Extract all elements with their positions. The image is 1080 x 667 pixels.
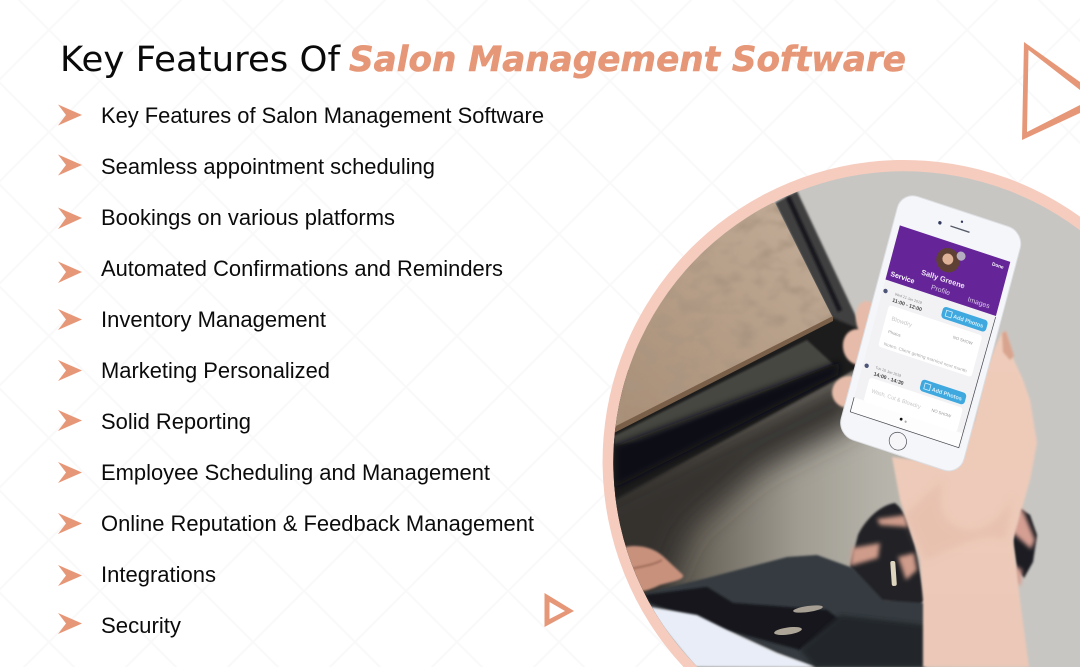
appointment 1: Photos [888, 329, 901, 338]
profile header: Done [991, 261, 1005, 271]
list item 9: Online Reputation & Feedback Management [101, 511, 534, 536]
appointment 1: Add Photos [952, 314, 984, 330]
title: Key Features Of [60, 40, 341, 80]
icon: small outlined triangle [544, 593, 574, 627]
appointment 2: Tue 20 Jan 2019 [875, 366, 902, 378]
appointment 2 [864, 364, 966, 431]
screen [850, 225, 1010, 449]
list item 11 [58, 613, 181, 638]
profile header [885, 225, 1010, 316]
white shirt [645, 606, 815, 667]
concrete floor [614, 171, 1080, 445]
sandal buckle [890, 561, 897, 586]
phone [837, 191, 1024, 475]
bench side [614, 318, 862, 500]
holding hand [892, 332, 1037, 667]
right sandal [1013, 505, 1037, 578]
photo ring [603, 160, 1080, 667]
appointment 1: Wed 21 Jan 2019 [895, 292, 922, 305]
list item 5: Inventory Management [101, 307, 326, 332]
thumb nail [1002, 331, 1014, 360]
bottom bar of the screen [850, 397, 963, 448]
photo: hand holding phone [590, 160, 1080, 667]
left sandal [849, 502, 924, 604]
list item 6: Marketing Personalized [101, 358, 330, 383]
list item 8: Employee Scheduling and Management [101, 460, 490, 485]
jeans buttons [793, 605, 823, 613]
bench leg [774, 192, 859, 329]
left hand [625, 546, 683, 591]
profile header: Service [890, 271, 915, 286]
palm creases [903, 494, 1004, 554]
bench wood top [614, 200, 833, 430]
list item 2: Seamless appointment scheduling [101, 154, 435, 179]
appointment 1: NO SHOW [952, 335, 973, 346]
appointment 1: 11:00 - 12:00 [892, 298, 922, 313]
list item 3: Bookings on various platforms [101, 205, 395, 230]
icon: large outlined triangle [1022, 42, 1080, 140]
profile header: Profile [930, 284, 951, 297]
shadow under bench [614, 370, 860, 616]
phone body [837, 191, 1024, 475]
home button [888, 432, 907, 450]
jeans [645, 555, 925, 667]
list item 11: Security [101, 613, 181, 638]
title [60, 40, 906, 80]
appointment 2: 14:00 - 14:30 [873, 371, 904, 387]
page dots [900, 418, 907, 423]
appointment 1 [879, 288, 988, 376]
list item 4: Automated Confirmations and Reminders [101, 256, 503, 281]
list item 7: Solid Reporting [101, 409, 251, 434]
feature list [58, 103, 544, 638]
profile header: Sally Greene [920, 268, 966, 291]
list item 1: Key Features of Salon Management Software [101, 103, 544, 128]
appointment 2: Add Photos [931, 387, 962, 403]
title: Salon Management Software [349, 40, 906, 80]
camera and speaker [938, 220, 970, 233]
fingers behind phone [830, 300, 872, 409]
list item 10: Integrations [101, 562, 216, 587]
profile header: Images [967, 296, 991, 311]
appointment 1: Notes: Client getting married next month [883, 341, 968, 374]
appointment 2: Wash, Cut & Blowdry [870, 388, 921, 411]
appointment 1: Blowdry [891, 316, 913, 329]
appointment 2: NO SHOW [931, 407, 952, 419]
